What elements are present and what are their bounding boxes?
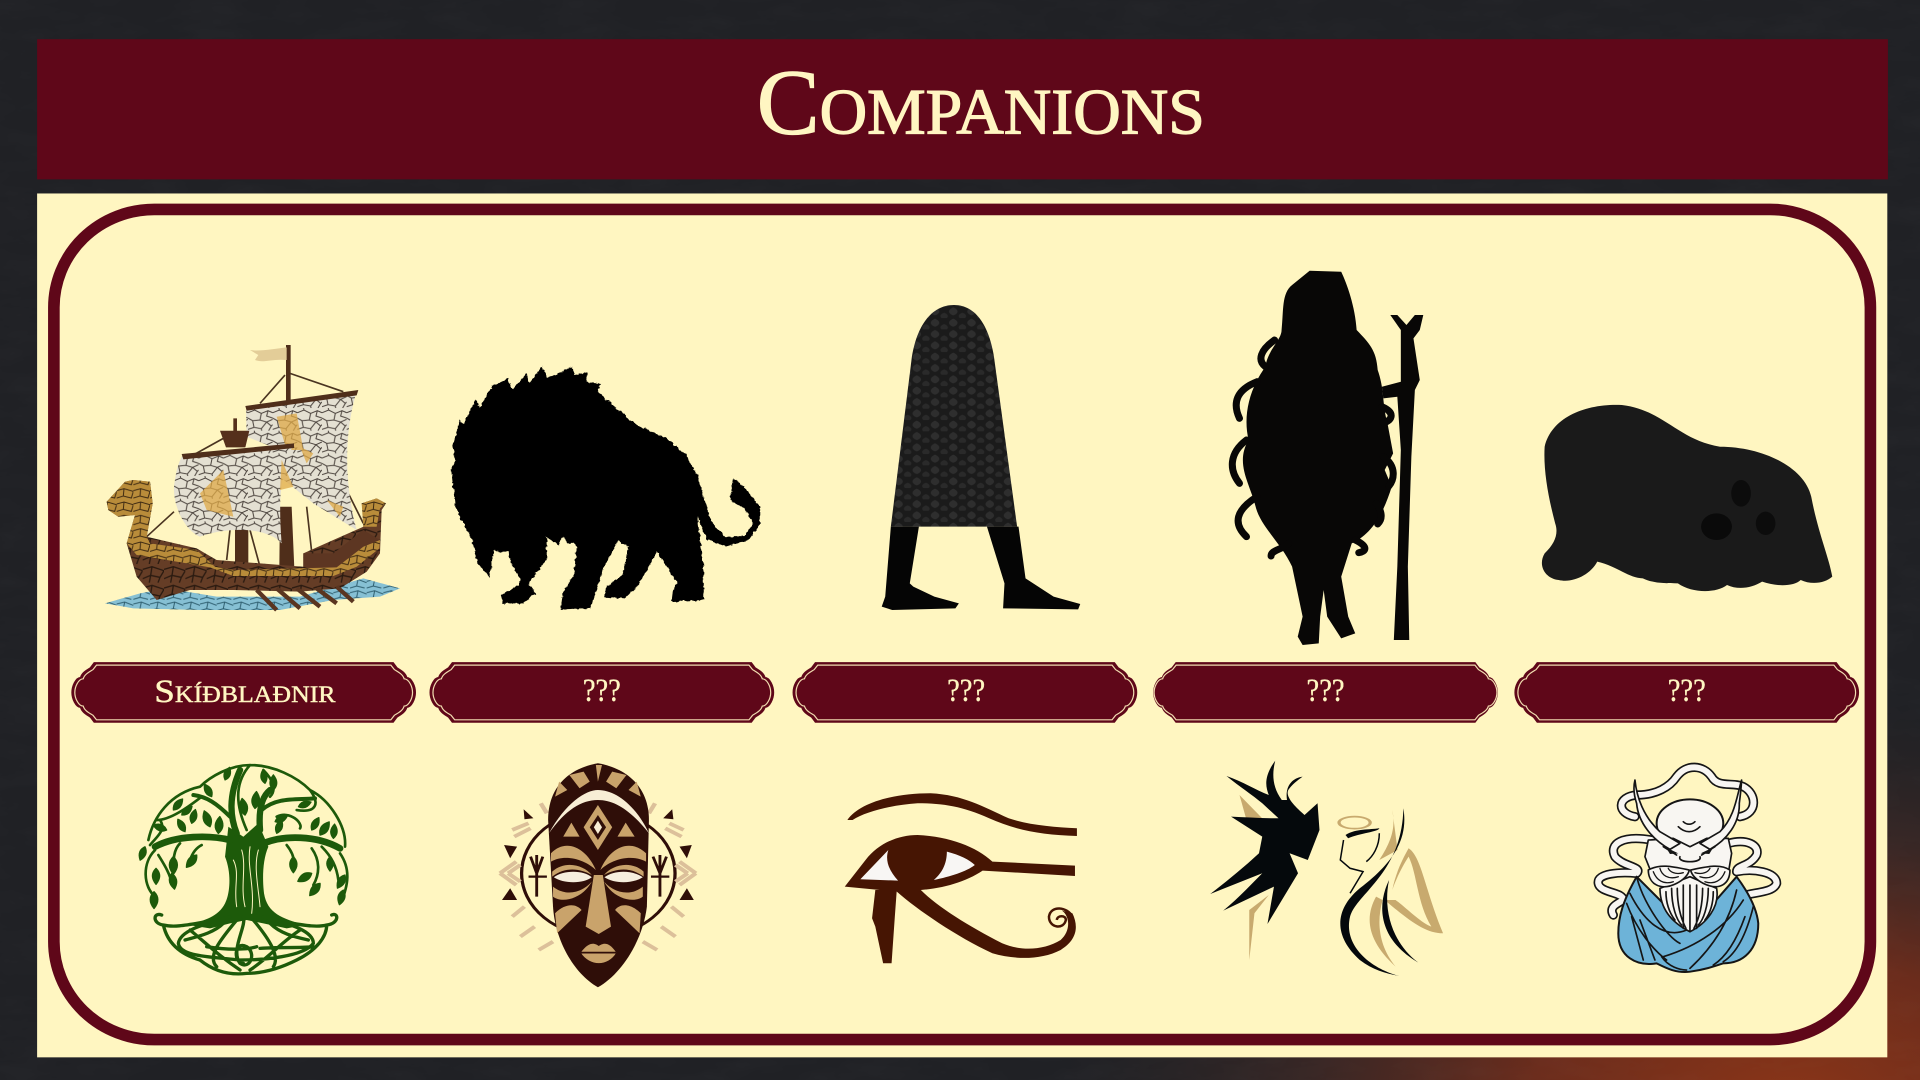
- nameplate: unknown companion 3: [793, 663, 1136, 722]
- nameplate: unknown companion 4: [1154, 663, 1497, 722]
- icon: longship Skidbladnir: [105, 345, 400, 610]
- silhouette: mystery figure with staff: [1232, 271, 1423, 645]
- panel: companions: [37, 193, 1887, 1057]
- nameplate: unknown companion 5: [1515, 663, 1858, 722]
- title: Companions: [757, 51, 1205, 154]
- silhouette: mystery cloaked figure: [882, 305, 1080, 610]
- title banner: [37, 39, 1888, 179]
- icon: world tree: [137, 765, 348, 974]
- nameplate: Skíðblaðnir: Skíðblaðnir: [154, 674, 336, 710]
- icon: tribal mask: [500, 763, 696, 987]
- icon: demon and angel: [1210, 761, 1443, 976]
- silhouette: mystery blob creature: [1542, 405, 1832, 591]
- silhouette: mystery lion beast: [451, 367, 760, 610]
- nameplate: unknown companion 2: [430, 663, 773, 722]
- icon: eye of Horus: [845, 793, 1077, 963]
- nameplate: unknown companion 5: ???: [1668, 673, 1706, 709]
- icon: bearded sage: [1598, 767, 1777, 972]
- nameplate: unknown companion 3: ???: [947, 673, 985, 709]
- nameplate: unknown companion 4: ???: [1307, 673, 1344, 709]
- panel frame: [54, 209, 1870, 1040]
- nameplate: unknown companion 2: ???: [583, 673, 621, 709]
- nameplate: Skíðblaðnir: [72, 663, 415, 722]
- hair tendrils: [1232, 340, 1393, 556]
